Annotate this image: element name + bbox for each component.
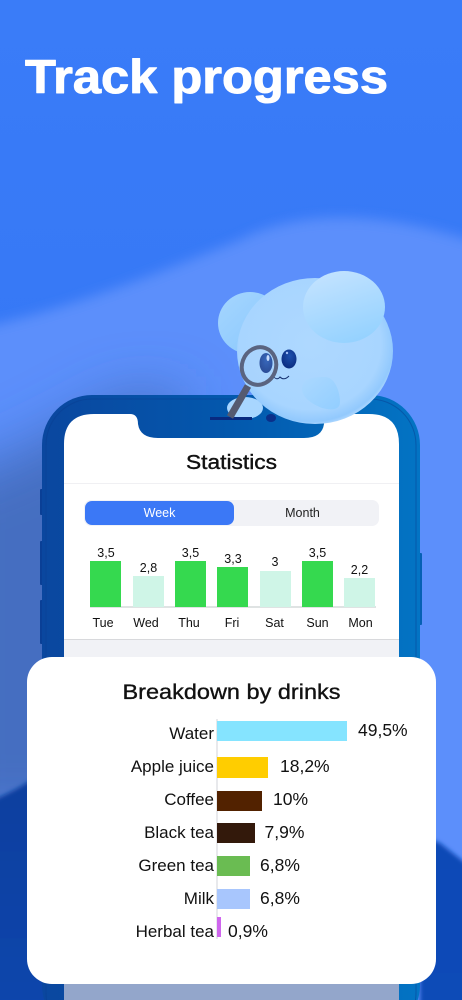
horizontal bar chart: Water (169, 724, 214, 743)
horizontal bar chart: 6,8% (260, 888, 300, 908)
card heading: Breakdown by drinks (122, 680, 340, 704)
left ear (218, 292, 282, 354)
body (237, 278, 393, 424)
horizontal bar chart: Milk (184, 889, 214, 908)
segmented control: Month (285, 506, 320, 520)
horizontal bar chart: 0,9% (228, 921, 268, 941)
weekly bar chart (90, 546, 376, 630)
horizontal bar chart: Apple juice (131, 757, 214, 776)
weekly bar chart: 3,5 (309, 546, 326, 560)
weekly bar chart: 3,5 (182, 546, 199, 560)
weekly bar chart: 3,3 (224, 552, 242, 566)
weekly bar chart: 2,2 (351, 563, 368, 577)
mascot: blue water droplet bear with magnifying glass (210, 271, 393, 424)
segmented control (84, 500, 379, 526)
segmented control: Week (144, 506, 176, 520)
phone screen (64, 414, 399, 1000)
phone frame (40, 395, 422, 1000)
front paw (227, 397, 263, 419)
horizontal bar chart: 10% (273, 789, 308, 809)
magnifying glass (230, 386, 248, 417)
horizontal bar chart: Coffee (164, 790, 214, 809)
screen heading: Statistics: Statistics (186, 451, 277, 474)
right ear (303, 271, 385, 343)
weekly bar chart: Thu (178, 616, 200, 630)
horizontal bar chart: 6,8% (260, 855, 300, 875)
weekly bar chart: Tue (92, 616, 114, 630)
lower paw (302, 377, 340, 409)
weekly bar chart: Fri (225, 616, 239, 630)
weekly bar chart: Wed (133, 616, 159, 630)
mouth (273, 376, 289, 379)
horizontal bar chart: Green tea (138, 856, 215, 875)
weekly bar chart: Sun (306, 616, 329, 630)
weekly bar chart: 2,8 (140, 561, 157, 575)
weekly bar chart: Mon (348, 616, 373, 630)
weekly bar chart: Sat (265, 616, 284, 630)
horizontal bar chart: Black tea (144, 823, 215, 842)
weekly bar chart: 3 (272, 555, 279, 569)
weekly bar chart: 3,5 (97, 546, 115, 560)
horizontal bar chart (131, 719, 408, 941)
eyes (260, 353, 272, 373)
title: Track progress (25, 51, 388, 104)
horizontal bar chart: Herbal tea (136, 922, 215, 941)
horizontal bar chart: 18,2% (280, 756, 330, 776)
horizontal bar chart: 49,5% (358, 720, 408, 740)
horizontal bar chart: 7,9% (264, 822, 304, 842)
card: breakdown by drinks (27, 657, 436, 984)
